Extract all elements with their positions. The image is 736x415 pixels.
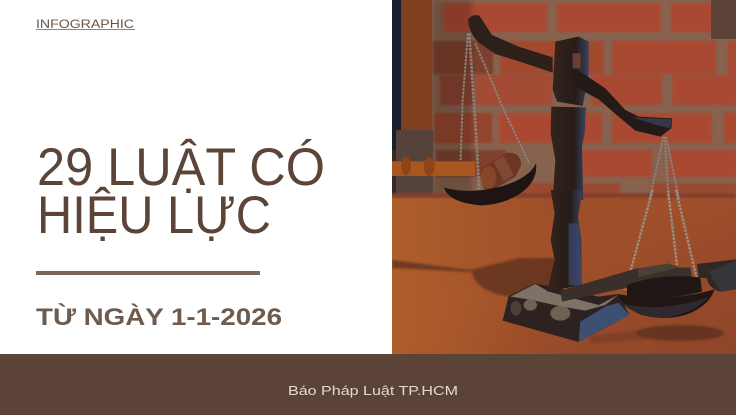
post bracket <box>553 37 589 106</box>
post lower <box>547 190 583 292</box>
divider line <box>36 271 260 275</box>
stand base <box>503 283 629 342</box>
table shadows <box>392 258 724 344</box>
gavel <box>392 153 521 189</box>
scale foot at right edge <box>697 259 736 292</box>
right beam <box>572 68 672 137</box>
right chains <box>649 137 679 200</box>
balance scale upper part <box>392 15 679 205</box>
right chains lower <box>625 190 699 290</box>
top right accent block <box>711 0 736 39</box>
weights and right pan <box>560 267 692 302</box>
brick wall <box>432 0 736 195</box>
footer source text: Báo Pháp Luật TP.HCM <box>288 384 458 398</box>
label: infographic: INFOGRAPHIC <box>36 19 134 31</box>
white left panel <box>0 0 392 354</box>
title: 29 LUẬT CÓ <box>37 138 325 197</box>
left beam <box>468 15 553 73</box>
left pan <box>444 163 536 205</box>
photo: scales and gavel on a wooden table <box>392 0 736 354</box>
left chains <box>461 33 529 193</box>
title <box>37 138 325 245</box>
title: HIỆU LỰC <box>37 186 271 245</box>
footer band <box>0 354 736 415</box>
wooden table <box>392 193 736 354</box>
balance scale lower part <box>503 190 736 342</box>
post <box>551 107 586 200</box>
subtitle: date: TỪ NGÀY 1-1-2026 <box>36 303 282 331</box>
wooden post at left of the wall <box>392 0 433 195</box>
